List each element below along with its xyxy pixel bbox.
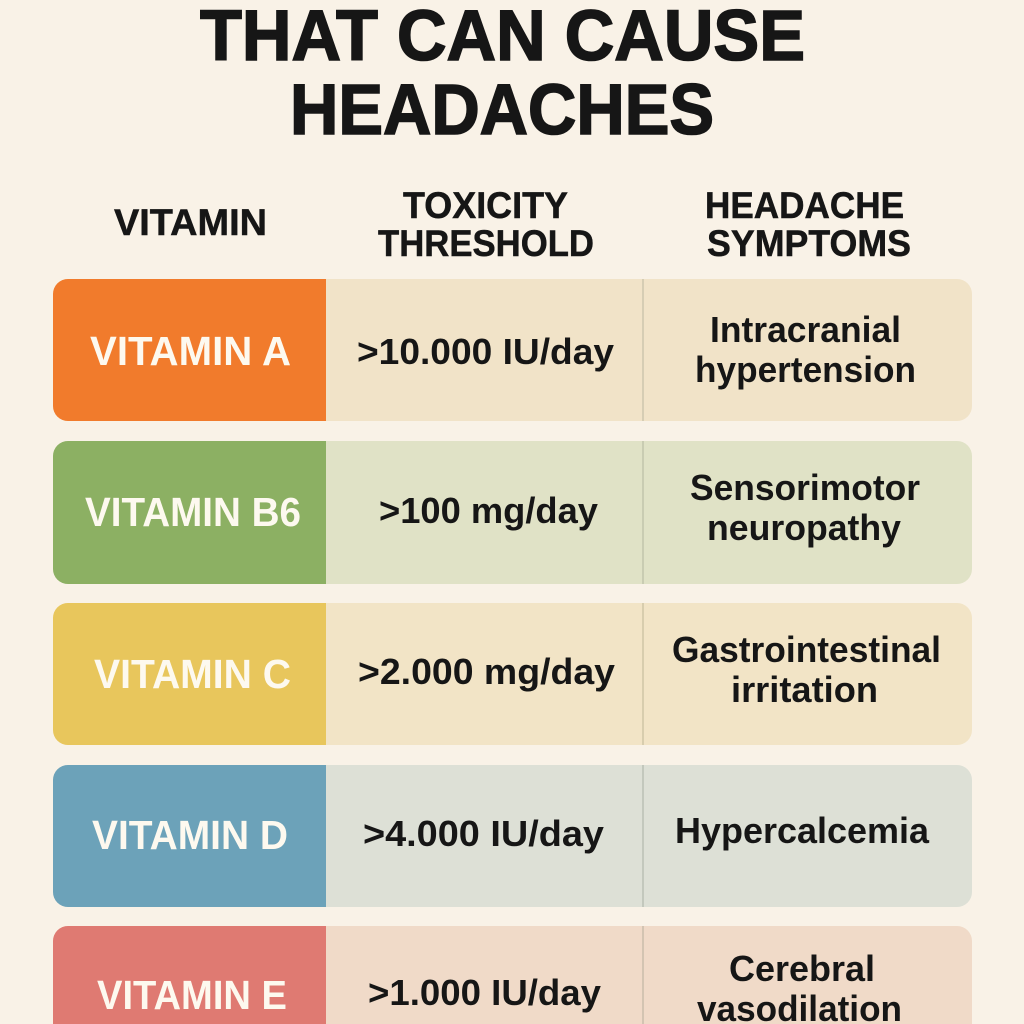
- symptoms: vitamin D: Hypercalcemia: [675, 810, 930, 851]
- threshold: vitamin D: >4.000 IU/day: [363, 813, 604, 854]
- header: vitamin: VITAMIN: [114, 202, 267, 243]
- header: headache symptoms: HEADACHE: [705, 185, 904, 226]
- row: vitamin B6: [53, 441, 972, 584]
- symptoms: vitamin B6: neuropathy: [707, 507, 901, 548]
- symptoms: vitamin C: Gastrointestinal: [672, 629, 941, 670]
- threshold: vitamin E: >1.000 IU/day: [368, 972, 601, 1013]
- label: vitamin E: VITAMIN E: [97, 972, 287, 1018]
- header: toxicity threshold: THRESHOLD: [378, 223, 594, 264]
- column headers: [114, 185, 911, 264]
- header: headache symptoms: [705, 185, 911, 264]
- row: vitamin C: [53, 603, 972, 745]
- symptoms: vitamin B6: Sensorimotor: [690, 467, 920, 508]
- symptoms: vitamin B6: [690, 467, 920, 548]
- symptoms: vitamin A: Intracranial: [710, 309, 901, 350]
- threshold: vitamin A: >10.000 IU/day: [357, 331, 614, 372]
- row: vitamin E: [53, 926, 972, 1024]
- threshold: vitamin C: >2.000 mg/day: [358, 651, 615, 692]
- symptoms: vitamin C: irritation: [731, 669, 878, 710]
- label: vitamin A: VITAMIN A: [90, 328, 291, 374]
- header: toxicity threshold: [378, 185, 594, 264]
- label: vitamin D: VITAMIN D: [92, 812, 288, 858]
- header: headache symptoms: SYMPTOMS: [707, 223, 911, 264]
- label: vitamin C: VITAMIN C: [94, 651, 291, 697]
- symptoms: vitamin E: [697, 948, 902, 1024]
- title: HEADACHES: [290, 71, 714, 150]
- label: vitamin B6: VITAMIN B6: [85, 489, 301, 535]
- threshold: vitamin B6: >100 mg/day: [379, 490, 598, 531]
- header: toxicity threshold: TOXICITY: [403, 185, 568, 226]
- symptoms: vitamin C: [672, 629, 941, 710]
- symptoms: vitamin E: Cerebral: [729, 948, 875, 989]
- row: vitamin A: [53, 279, 972, 421]
- row: vitamin D: [53, 765, 972, 907]
- symptoms: vitamin A: [695, 309, 916, 390]
- symptoms: vitamin A: hypertension: [695, 349, 916, 390]
- title: [200, 0, 805, 150]
